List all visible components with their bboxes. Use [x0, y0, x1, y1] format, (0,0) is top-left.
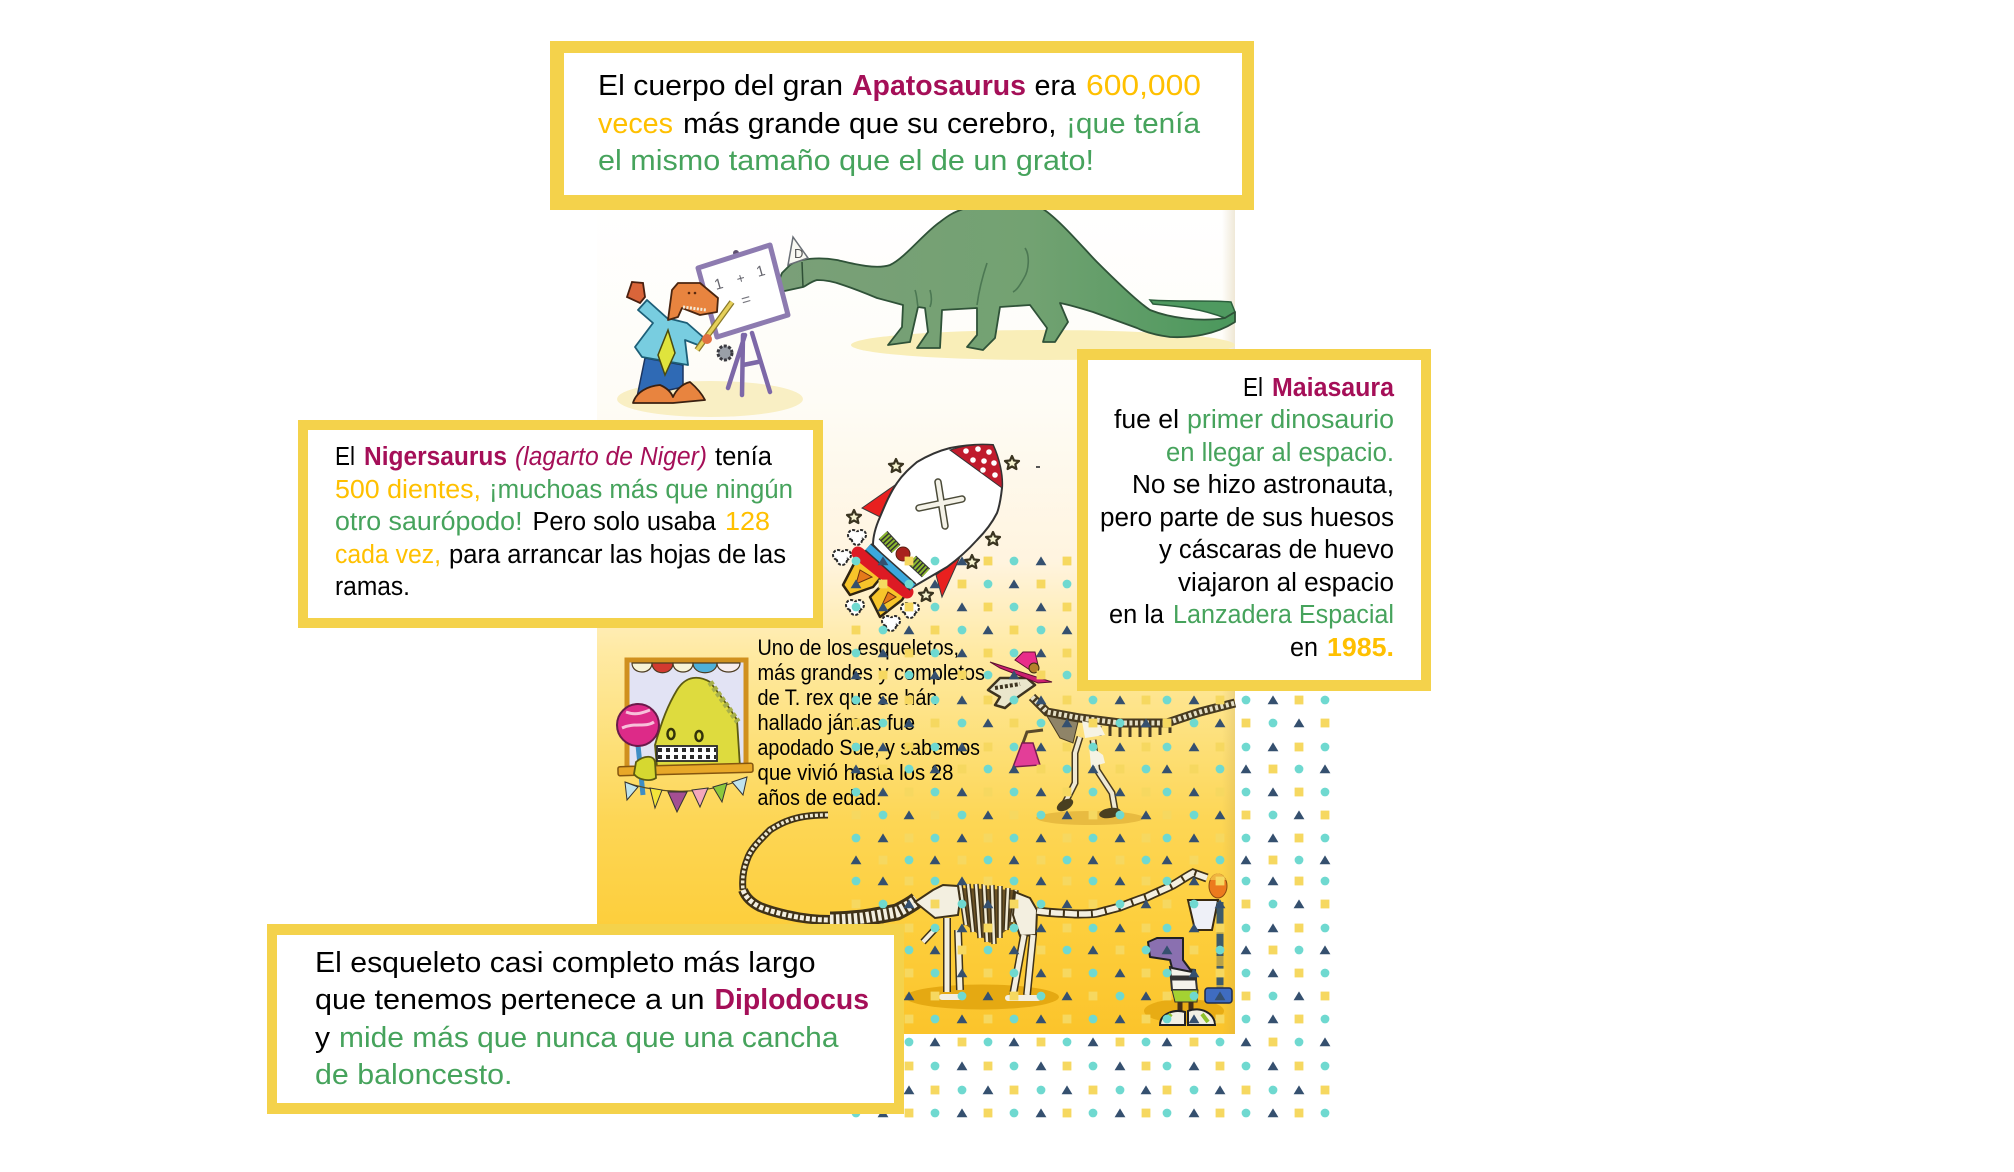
illustration: T. rex skeleton with a hat and handbag	[988, 652, 1235, 825]
panel: Nigersaurus fact: cada vez,	[335, 541, 441, 569]
panel: Maiasaura fact: fue el	[1114, 406, 1179, 434]
panel: Nigersaurus fact	[298, 420, 823, 628]
panel: Diplodocus fact: que tenemos pertenece a un	[315, 984, 704, 1016]
panel: Maiasaura fact: y cáscaras de huevo	[1159, 536, 1394, 564]
illustration: bone rocket	[833, 445, 1040, 631]
panel: Nigersaurus fact: Nigersaurus	[364, 443, 507, 471]
panel: Maiasaura fact: en la	[1109, 601, 1165, 629]
illustration: dinosaur in a puppet booth	[617, 660, 753, 812]
panel: Nigersaurus fact: (lagarto de Niger)	[515, 443, 707, 471]
illustration: Diplodocus skeleton	[743, 815, 1207, 1010]
text block: Sue the T. rex: Uno de los esqueletos,	[758, 635, 959, 660]
panel: Apatosaurus fact	[550, 41, 1254, 210]
illustration: teacher dinosaur at a blackboard: 1	[712, 275, 725, 294]
panel: Diplodocus fact: Diplodocus	[714, 984, 869, 1016]
panel: Nigersaurus fact: tenía	[715, 443, 773, 471]
text block: Sue the T. rex	[758, 635, 985, 810]
panel: Maiasaura fact	[1077, 349, 1431, 691]
panel: Apatosaurus fact: el mismo tamaño que el de un grato!	[598, 145, 1094, 177]
panel: Nigersaurus fact: ramas.	[335, 573, 410, 601]
panel: Diplodocus fact: de baloncesto.	[315, 1059, 512, 1091]
text block: Sue the T. rex: apodado Sue, y sabemos	[758, 735, 980, 760]
panel: Maiasaura fact: Maiasaura	[1272, 374, 1395, 402]
panel: Diplodocus fact	[267, 924, 904, 1114]
panel: Apatosaurus fact: ¡que tenía	[1066, 108, 1201, 140]
panel: Nigersaurus fact: 128	[725, 508, 770, 536]
illustration: teacher dinosaur at a blackboard: 1	[754, 262, 767, 281]
panel: Apatosaurus fact: más grande que su cerebro,	[683, 108, 1056, 140]
panel: Diplodocus fact: y	[315, 1022, 331, 1054]
panel: Apatosaurus fact: Apatosaurus	[852, 70, 1026, 102]
illustration: green Apatosaurus wearing a dunce cap: D	[794, 246, 803, 261]
illustration: green Apatosaurus wearing a dunce cap	[775, 209, 1235, 360]
text block: Sue the T. rex: más grandes y completos	[758, 660, 985, 685]
illustration: teacher dinosaur at a blackboard: =	[739, 291, 753, 310]
panel: Apatosaurus fact: veces	[598, 108, 673, 140]
illustration panel: dinosaur scenes	[597, 205, 1235, 1034]
panel: Maiasaura fact: en	[1290, 634, 1318, 662]
panel: Maiasaura fact: No se hizo astronauta,	[1132, 471, 1394, 499]
illustration: small purple dinosaur with a lollipop stand	[1144, 873, 1232, 1025]
panel: Nigersaurus fact: otro saurópodo!	[335, 508, 522, 536]
text block: Sue the T. rex: que vivió hasta los 28	[758, 760, 954, 785]
panel: Apatosaurus fact: era	[1034, 70, 1077, 102]
panel: Maiasaura fact: en llegar al espacio.	[1166, 439, 1394, 467]
panel: Maiasaura fact: El	[1243, 374, 1263, 402]
panel: Maiasaura fact: viajaron al espacio	[1178, 569, 1394, 597]
panel: Nigersaurus fact: para arrancar las hojas de las	[449, 541, 786, 569]
panel: Nigersaurus fact: 500 dientes,	[335, 476, 481, 504]
panel: Maiasaura fact: Lanzadera Espacial	[1173, 601, 1394, 629]
text block: Sue the T. rex: de T. rex que se hán	[758, 685, 938, 710]
panel: Nigersaurus fact: Pero solo usaba	[532, 508, 717, 536]
panel: Nigersaurus fact: ¡muchoas más que ningún	[489, 476, 793, 504]
panel: Apatosaurus fact: 600,000	[1086, 70, 1201, 102]
dot pattern overlay	[851, 556, 1330, 1117]
text block: Sue the T. rex: hallado jámas fue	[758, 710, 915, 735]
illustration: teacher dinosaur at a blackboard: +	[734, 269, 747, 287]
panel: Diplodocus fact: El esqueleto casi completo más largo	[315, 947, 816, 979]
panel: Apatosaurus fact: El cuerpo del gran	[598, 70, 843, 102]
panel: Maiasaura fact: pero parte de sus huesos	[1100, 504, 1394, 532]
panel: Diplodocus fact: mide más que nunca que una cancha	[339, 1022, 839, 1054]
panel: Nigersaurus fact: El	[335, 443, 355, 471]
panel: Maiasaura fact: primer dinosaurio	[1187, 406, 1394, 434]
panel: Maiasaura fact: 1985.	[1327, 634, 1394, 662]
illustration: teacher dinosaur at a blackboard	[617, 245, 803, 417]
text block: Sue the T. rex: años de edad.	[758, 785, 882, 810]
